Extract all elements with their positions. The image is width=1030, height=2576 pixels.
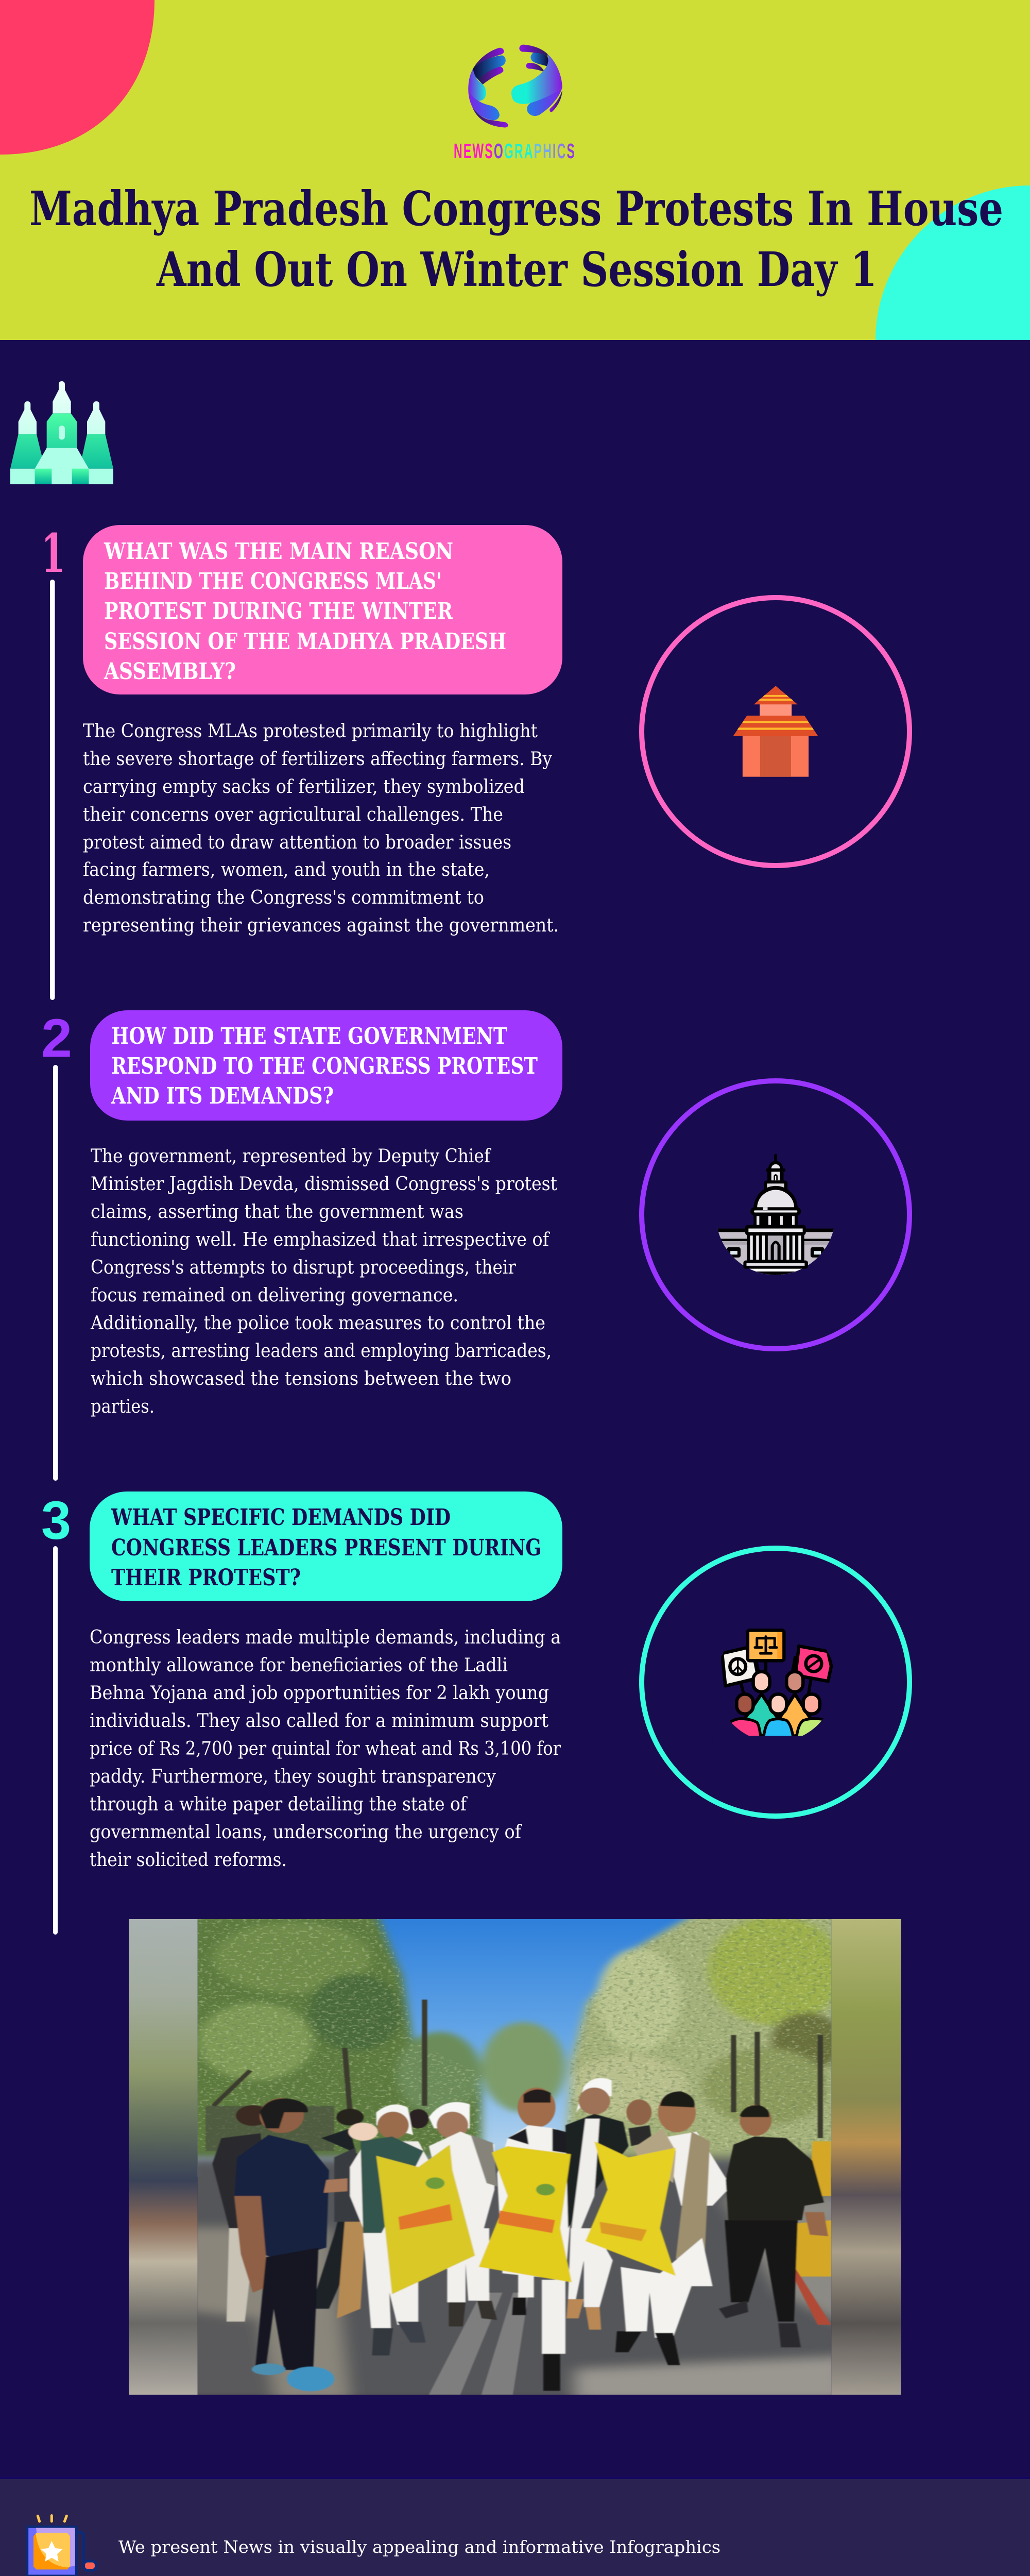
body text 2: claims, asserting that the government was: [91, 1201, 464, 1223]
body text 1: carrying empty sacks of fertilizer, they symbolized: [83, 776, 525, 798]
body text 1: [83, 721, 559, 936]
person: white turban black jacket: [565, 2078, 652, 2330]
body text 3: Congress leaders made multiple demands, including a: [90, 1627, 561, 1648]
body text 3: individuals. They also called for a minimum support: [90, 1710, 548, 1732]
heading box 1: PROTEST DURING THE WINTER: [104, 598, 453, 624]
body text 3: their solicited reforms.: [90, 1850, 287, 1871]
heading box 2: AND ITS DEMANDS?: [111, 1083, 334, 1109]
ground: [182, 2158, 847, 2402]
back row heads: [753, 1672, 770, 1692]
body text 2: The government, represented by Deputy Chief: [91, 1146, 491, 1167]
sack middle: [479, 2146, 572, 2282]
icon circle 3: [642, 1548, 909, 1816]
body text 2: parties.: [91, 1396, 154, 1417]
body text 1: The Congress MLAs protested primarily to highlight: [83, 721, 538, 742]
tree trunks and lamp: [213, 1999, 820, 2138]
timeline line 1: [50, 580, 55, 1000]
title: [29, 181, 1003, 297]
front row bodies: [730, 1717, 762, 1736]
body text 2: Minister Jagdish Devda, dismissed Congress's protest: [91, 1174, 557, 1195]
icon: star frame: [27, 2516, 96, 2576]
person: navy polo man: [234, 2098, 347, 2391]
body text 3: through a white paper detailing the state of: [90, 1794, 468, 1815]
heading box 3: THEIR PROTEST?: [111, 1565, 301, 1591]
body text 2: focus remained on delivering governance.: [91, 1285, 458, 1306]
blurred photo side strips: [129, 1919, 901, 2395]
tagline: We present News in visually appealing and informative Infographics: [118, 2537, 720, 2557]
panel: question 2: [41, 1008, 909, 1481]
body text 2: which showcased the tensions between the two: [91, 1368, 511, 1389]
person: checked vest man: [350, 2105, 429, 2355]
body text 2: Additionally, the police took measures to control the: [90, 1313, 545, 1334]
heading box 1: SESSION OF THE MADHYA PRADESH: [104, 629, 506, 655]
number 3: 3: [41, 1490, 71, 1551]
placard poles: [740, 1656, 811, 1696]
heading box 3: [90, 1492, 562, 1601]
trees: [187, 1912, 844, 2164]
heading box 1: ASSEMBLY?: [104, 658, 236, 685]
back row bodies: [744, 1694, 779, 1737]
info band: [0, 2477, 1030, 2576]
body text 3: monthly allowance for beneficiaries of the Ladli: [90, 1655, 508, 1676]
number 1: 1: [41, 522, 65, 585]
body text 2: [90, 1146, 557, 1417]
icon: domed church: [10, 381, 113, 484]
body text 3: [90, 1627, 561, 1871]
heading box 3: WHAT SPECIFIC DEMANDS DID: [111, 1504, 451, 1531]
photo main scene: [182, 1912, 847, 2402]
body text 3: Behna Yojana and job opportunities for 2 lakh young: [90, 1683, 549, 1704]
person: white kurta man: [429, 2102, 497, 2327]
heading box 2: [90, 1010, 562, 1121]
body text 1: their concerns over agricultural challenges. The: [83, 804, 503, 825]
front row heads: [736, 1694, 753, 1714]
body text 1: facing farmers, women, and youth in the state,: [83, 859, 490, 880]
logo: newsographics: [454, 45, 576, 163]
icon circle 2: [642, 1081, 909, 1349]
person: far left: [236, 2105, 269, 2126]
panel: question 1: [41, 522, 909, 1000]
body text 3: price of Rs 2,700 per quintal for wheat and Rs 3,100 for: [90, 1738, 561, 1759]
heading box 1: WHAT WAS THE MAIN REASON: [104, 538, 453, 565]
placard: prohibited: [795, 1646, 831, 1681]
number 2: 2: [41, 1008, 72, 1069]
body text 2: protests, arresting leaders and employing barricades,: [91, 1341, 552, 1362]
header panel: [0, 0, 1030, 340]
decorative pink circle: [0, 0, 154, 155]
body text 1: protest aimed to draw attention to broader issues: [83, 832, 511, 853]
heading box 2: RESPOND TO THE CONGRESS PROTEST: [111, 1053, 538, 1079]
yellow barricade: [794, 2141, 831, 2277]
decorative cyan circle: [876, 185, 1030, 340]
person: right man in black: [719, 2105, 828, 2347]
photo: congress leaders holding fertilizer sacks: [129, 1912, 901, 2402]
body text 2: functioning well. He emphasized that irrespective of: [91, 1229, 550, 1250]
foliage texture: [198, 1919, 831, 2151]
heading box 2: HOW DID THE STATE GOVERNMENT: [111, 1023, 507, 1049]
body text 2: Congress's attempts to disrupt proceedings, their: [91, 1257, 517, 1278]
person: beige shawl man: [615, 2091, 731, 2365]
body text 1: demonstrating the Congress's commitment to: [83, 887, 484, 908]
timeline line 2: [53, 1065, 58, 1481]
body text 1: representing their grievances against the government.: [83, 915, 559, 936]
title: And Out On Winter Session Day 1: [156, 242, 877, 297]
heading box 3: CONGRESS LEADERS PRESENT DURING: [111, 1535, 541, 1561]
heading box 1: [83, 525, 562, 694]
logo wordmark: NEWSOGRAPHICS: [454, 139, 576, 163]
icon: protesters with placards: [721, 1629, 833, 1736]
placard: peace: [722, 1647, 758, 1686]
body text 1: the severe shortage of fertilizers affecting farmers. By: [83, 749, 553, 770]
body text 3: governmental loans, underscoring the urgency of: [90, 1822, 522, 1843]
heading box 1: BEHIND THE CONGRESS MLAS': [104, 568, 442, 595]
logo globe hands: [468, 45, 562, 128]
person: centre man black vest: [497, 2088, 584, 2391]
sack right: [586, 2141, 676, 2276]
body text 3: paddy. Furthermore, they sought transparency: [90, 1766, 496, 1787]
icon circle 1: [642, 598, 909, 866]
people: background group: [311, 2128, 366, 2309]
placard: scales: [748, 1630, 784, 1660]
icon: capitol building: [716, 1154, 835, 1276]
icon: temple house: [733, 686, 818, 777]
sack left: [376, 2144, 475, 2294]
timeline line 3: [53, 1546, 58, 1935]
panel: question 3: [41, 1490, 909, 1935]
